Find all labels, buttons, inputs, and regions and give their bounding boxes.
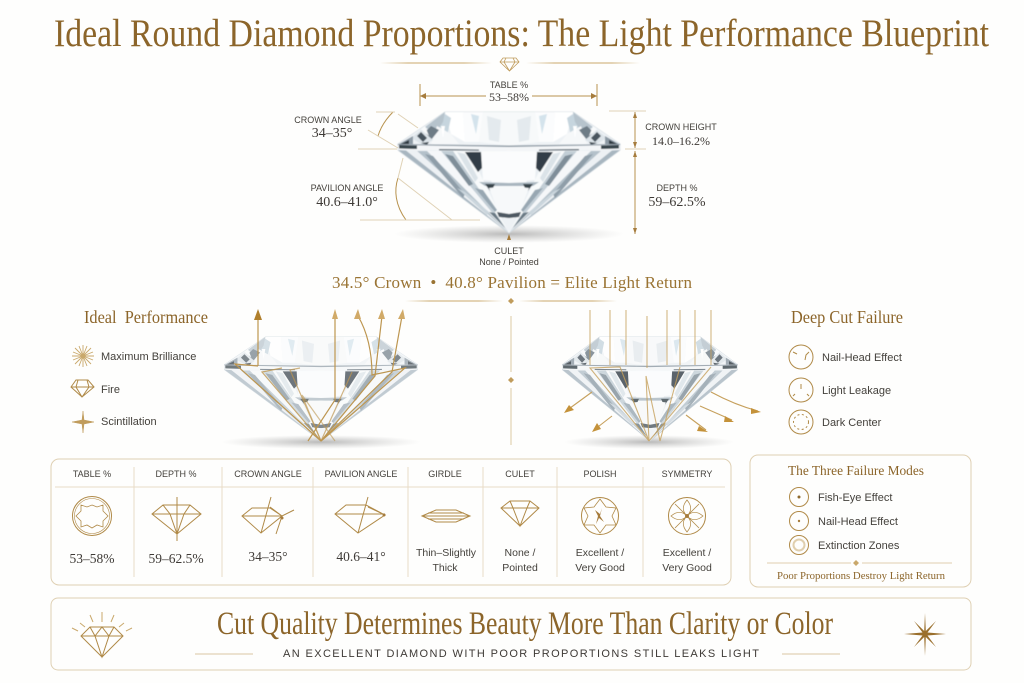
column: culet: None /	[505, 547, 536, 559]
panel: specification table	[51, 459, 731, 585]
rays: entering and leaking light	[566, 310, 758, 441]
item: extinction zones: Extinction Zones	[818, 540, 900, 552]
panel ornament	[767, 560, 952, 566]
formula heading: 34.5° Crown • 40.8° Pavilion = Elite Light Return	[332, 273, 692, 292]
panel heading: The Three Failure Modes	[788, 463, 924, 478]
label: nail-head effect: Nail-Head Effect	[822, 352, 902, 364]
label: fire: Fire	[101, 384, 120, 396]
column: depth %: 59–62.5%	[148, 551, 204, 566]
dimension: crown angle: CROWN ANGLE	[294, 115, 362, 125]
dimension: culet	[479, 234, 539, 267]
column: girdle: GIRDLE	[428, 469, 462, 479]
column: pavilion angle	[325, 469, 397, 564]
label: scintillation: Scintillation	[101, 416, 157, 428]
column: pavilion angle: 40.6–41°	[336, 549, 386, 564]
column: symmetry: SYMMETRY	[662, 469, 712, 479]
icon: fire	[71, 380, 94, 397]
center divider	[508, 316, 514, 445]
dimension: table: 53–58%	[489, 90, 529, 104]
icon: star sparkle	[904, 613, 946, 656]
dimension: table	[420, 80, 597, 106]
column: polish: Excellent /	[576, 547, 624, 559]
icon: scintillation	[72, 411, 94, 433]
banner subtitle: AN EXCELLENT DIAMOND WITH POOR PROPORTIONS STILL LEAKS LIGHT	[283, 648, 759, 660]
dimension: depth: DEPTH %	[656, 183, 698, 193]
icon: nail-head	[789, 345, 813, 369]
column: polish: POLISH	[583, 469, 617, 479]
dimension: crown angle: 34–35°	[312, 126, 352, 141]
panel caption: Poor Proportions Destroy Light Return	[777, 571, 946, 582]
banner headline: Cut Quality Determines Beauty More Than Clarity or Color	[217, 606, 833, 642]
dimension: pavilion angle: 40.6–41.0°	[316, 195, 378, 210]
label: maximum brilliance: Maximum Brilliance	[101, 351, 196, 363]
column: crown angle: CROWN ANGLE	[234, 469, 302, 479]
column: polish	[575, 469, 625, 574]
icon: light leakage	[789, 378, 813, 402]
dimension: pavilion angle: PAVILION ANGLE	[311, 183, 383, 193]
column: girdle	[416, 469, 477, 574]
item: fish-eye effect: Fish-Eye Effect	[818, 492, 892, 504]
column: table %	[70, 469, 114, 566]
item: nail-head effect	[790, 512, 898, 530]
column: girdle: Thin–Slightly	[416, 547, 477, 559]
item: nail-head effect: Nail-Head Effect	[818, 516, 898, 528]
ideal diamond with light rays	[221, 309, 421, 449]
dimension: depth	[633, 151, 706, 234]
icon: maximum brilliance	[72, 345, 94, 367]
banner rules	[195, 653, 840, 655]
dimension: depth: 59–62.5%	[648, 195, 706, 210]
column: polish: Very Good	[575, 562, 625, 574]
dimension: crown height	[609, 111, 717, 149]
column: symmetry	[662, 469, 712, 574]
heading: deep cut failure: Deep Cut Failure	[791, 307, 903, 327]
label: light leakage: Light Leakage	[822, 385, 891, 397]
deep cut diamond with leaking rays	[562, 310, 761, 449]
column: culet	[501, 469, 539, 574]
formula ornament	[405, 298, 617, 304]
column: culet: CULET	[505, 469, 535, 479]
dimension: pavilion angle	[311, 158, 480, 220]
column: table %: 53–58%	[70, 551, 114, 566]
icon: sparkling diamond	[72, 612, 132, 657]
dimension: culet: None / Pointed	[479, 257, 539, 267]
column: pavilion angle: PAVILION ANGLE	[325, 469, 397, 479]
icon: dark center	[789, 410, 813, 434]
panel: three failure modes	[750, 455, 971, 587]
column: crown angle	[234, 469, 302, 564]
dimension: crown angle	[294, 112, 418, 149]
column: table %: TABLE %	[73, 469, 111, 479]
column: symmetry: Excellent /	[663, 547, 711, 559]
item: fish-eye effect	[790, 488, 892, 506]
title ornament	[380, 58, 640, 71]
dimension: crown height: CROWN HEIGHT	[645, 122, 717, 132]
dimension: crown height: 14.0–16.2%	[652, 134, 710, 148]
panel: bottom banner	[51, 598, 971, 670]
heading: ideal performance: Ideal Performance	[84, 307, 208, 327]
column: symmetry: Very Good	[662, 562, 712, 574]
item: extinction zones	[790, 536, 900, 554]
dimension: culet: CULET	[494, 246, 524, 256]
column: depth %: DEPTH %	[155, 469, 197, 479]
dimension: table: TABLE %	[490, 80, 528, 90]
column: depth %	[148, 469, 204, 566]
rays: returning light	[235, 316, 405, 441]
main diamond	[394, 112, 624, 243]
column: culet: Pointed	[502, 562, 538, 574]
label: dark center: Dark Center	[822, 417, 882, 429]
column: crown angle: 34–35°	[248, 549, 288, 564]
column: girdle: Thick	[432, 562, 458, 574]
